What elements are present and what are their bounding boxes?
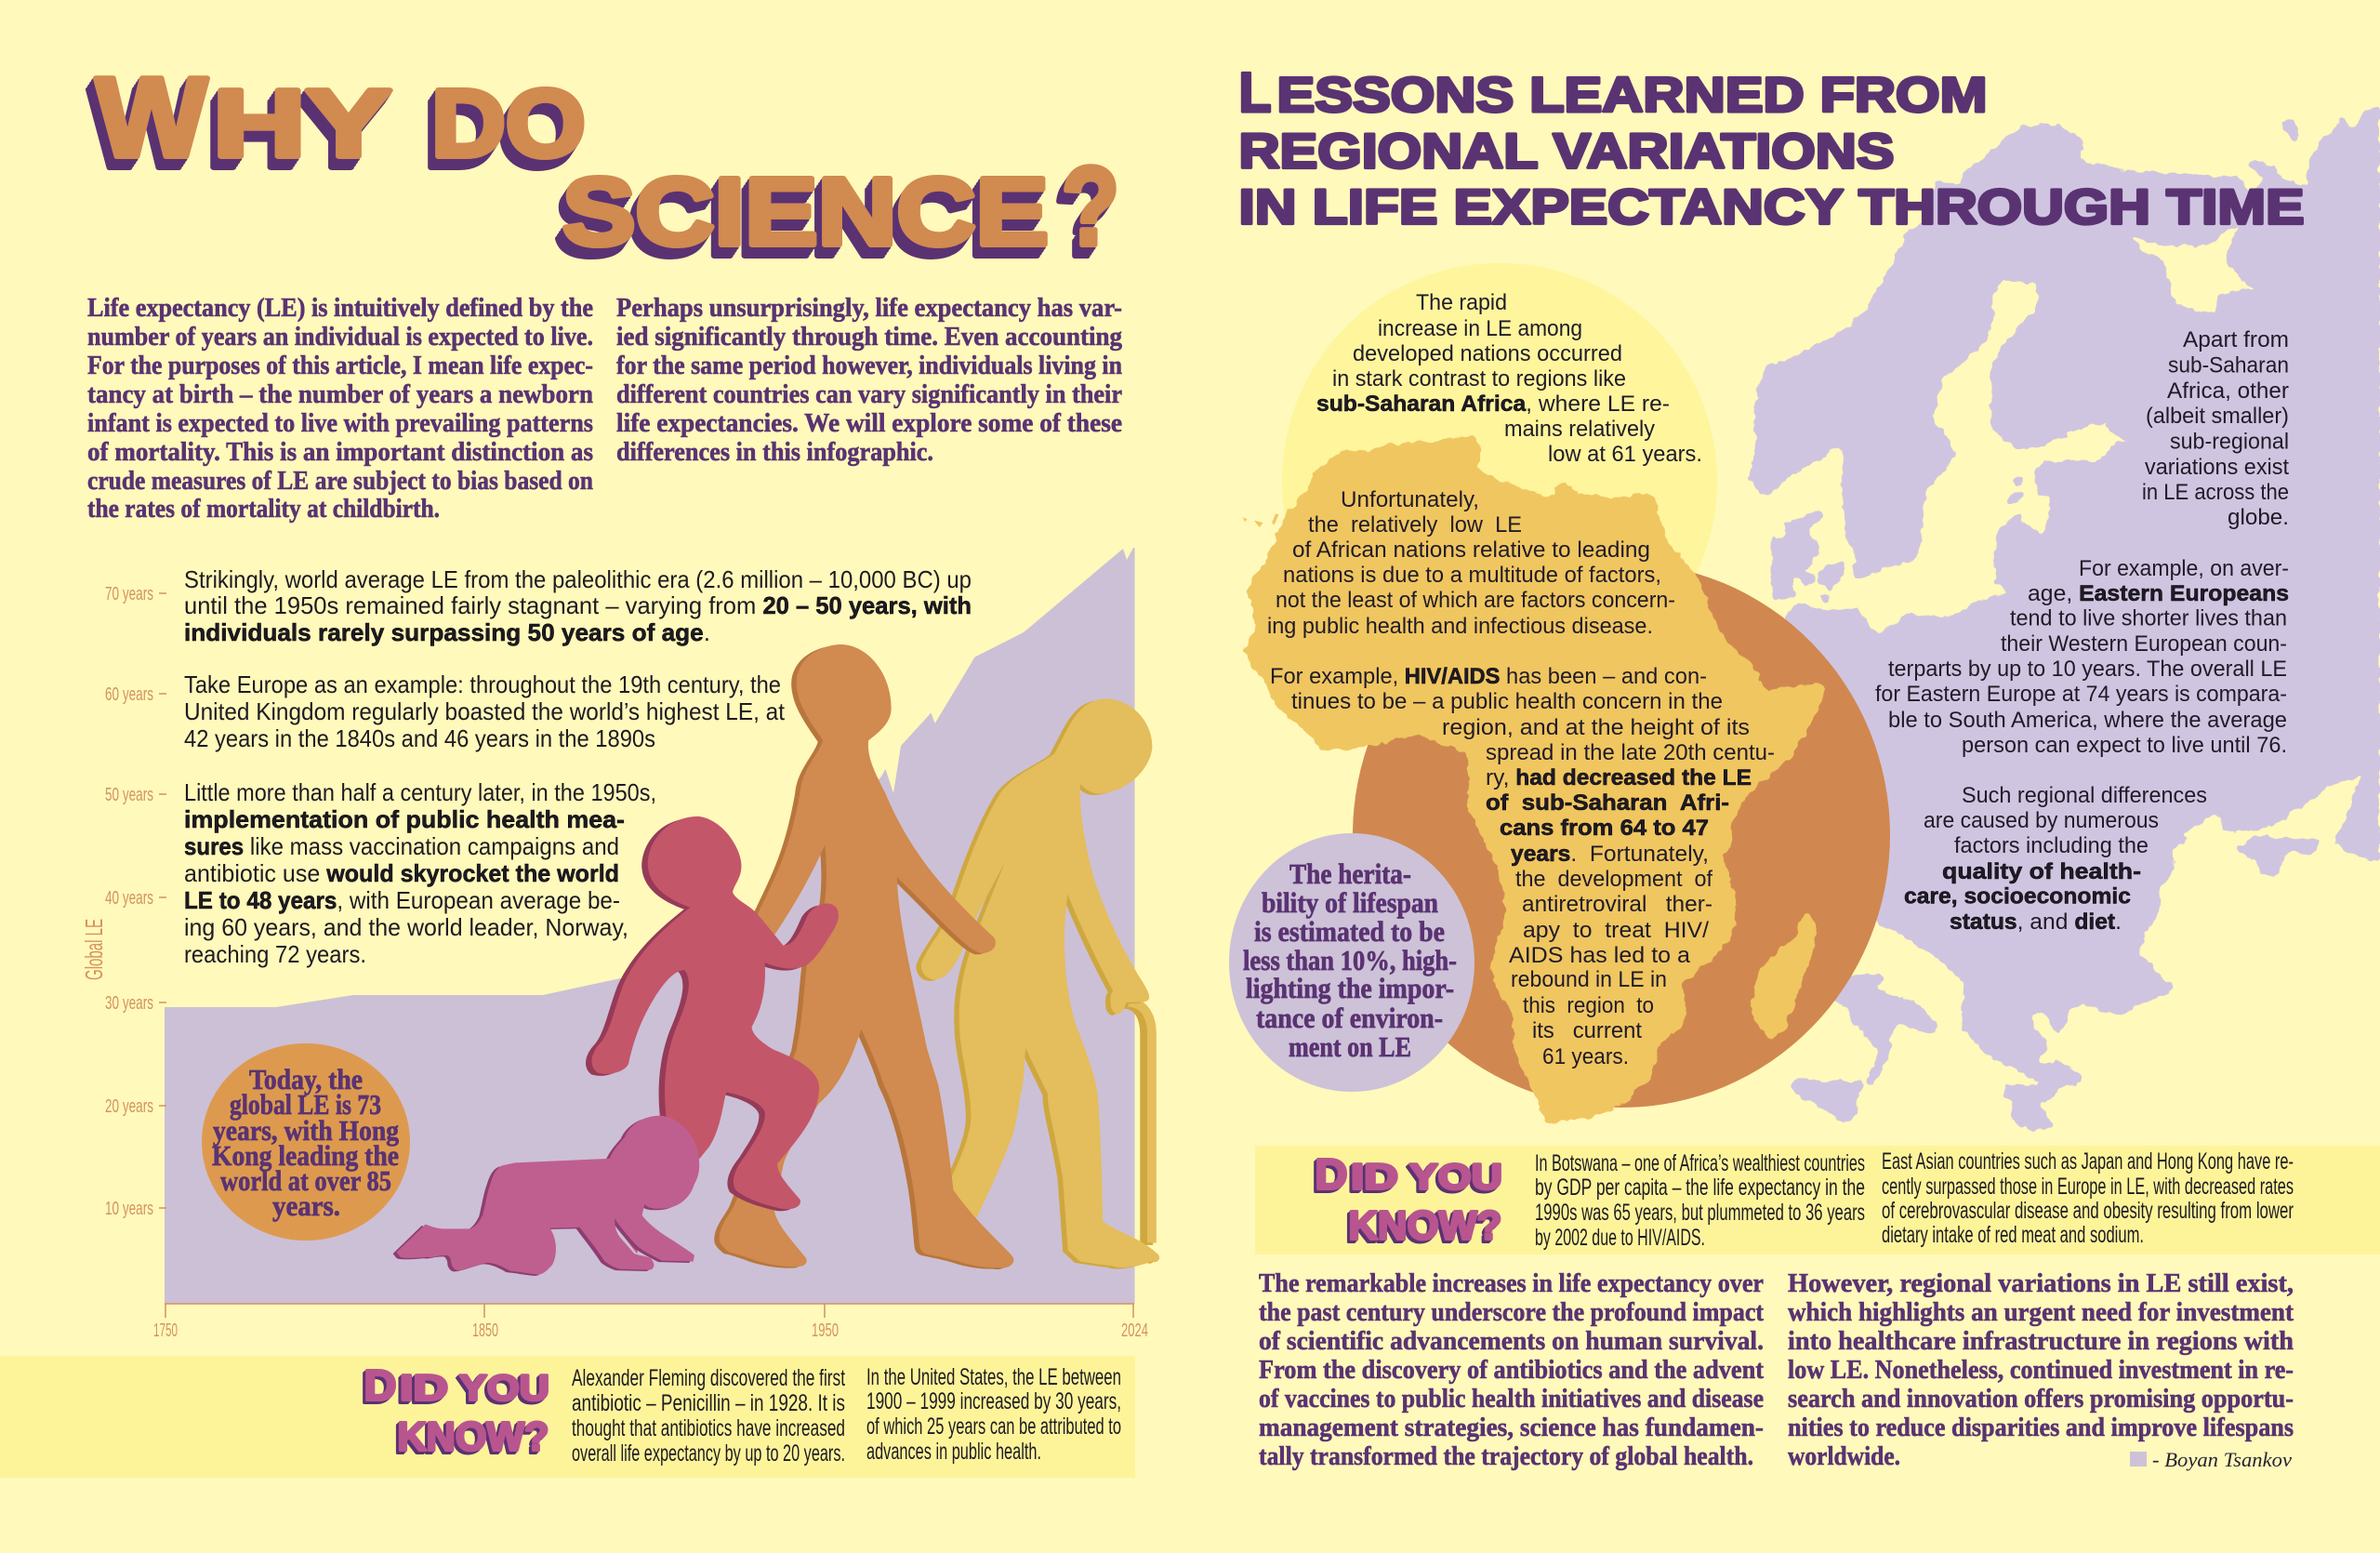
- figure: crawling baby: [397, 1116, 699, 1274]
- chart text: paleolithic era: Strikingly, world average LE from the paleolithic era (2.6 million – 10,000 BC) up: [184, 565, 972, 593]
- heading: did you know: ID: [1351, 1157, 1398, 1198]
- text: sub-regional variations: variations exist: [2145, 455, 2289, 480]
- figures: stages of life: [397, 644, 1159, 1274]
- chart text: 1950s public health: sures like mass vaccination campaigns and: [184, 832, 619, 860]
- callout: heritability of lifespan: [1229, 833, 1474, 1092]
- text: rapid increase in LE: low at 61 years.: [1548, 442, 1702, 467]
- callout: today's global LE: global LE is 73: [230, 1088, 381, 1121]
- chart text: paleolithic era: [184, 565, 972, 646]
- chart text: 1950s public health: antibiotic use would skyrocket the world: [184, 859, 619, 887]
- heading: did you know: [364, 1361, 549, 1460]
- map of Africa: [1243, 437, 1824, 1124]
- intro text: column one: [87, 293, 593, 524]
- text: sub-regional variations: Africa, other: [2167, 378, 2289, 404]
- fact: United States: 1900 – 1999 increased by 30 years,: [866, 1388, 1121, 1414]
- text: Eastern Europeans: ble to South America, where the average: [1888, 708, 2287, 733]
- conclusion text: column two: nities to reduce disparities and improve lifespans: [1788, 1413, 2294, 1442]
- conclusion text: column one: tally transformed the trajectory of global health.: [1259, 1441, 1753, 1471]
- conclusion text: column one: From the discovery of antibiotics and the advent: [1259, 1355, 1764, 1385]
- conclusion text: column one: the past century underscore the profound impact: [1259, 1297, 1764, 1327]
- text: Eastern Europeans: for Eastern Europe at 74 years is compara-: [1875, 682, 2287, 707]
- y axis labels: 50 years: [105, 785, 153, 805]
- Canary Islands: [1243, 513, 1278, 527]
- y axis labels: 30 years: [105, 993, 153, 1014]
- chart text: paleolithic era: until the 1950s remained fairly stagnant – varying from 20 – 50 years, with: [184, 591, 972, 619]
- text: regional differences: [1904, 783, 2207, 935]
- pale sun circle: [1282, 263, 1717, 698]
- fact: Botswana: In Botswana – one of Africa’s wealthiest countries: [1535, 1150, 1865, 1176]
- text: factors in Africa: nations is due to a multitude of factors,: [1283, 563, 1661, 588]
- heading: did you know: ID: [400, 1369, 448, 1408]
- fact: penicillin: thought that antibiotics have increased: [572, 1415, 845, 1441]
- text: rapid increase in LE: developed nations occurred: [1353, 341, 1622, 366]
- x axis labels: 2024: [1121, 1321, 1148, 1341]
- figure: child: [592, 816, 839, 1209]
- conclusion text: column two: which highlights an urgent need for investment: [1788, 1297, 2294, 1327]
- fact: penicillin: [572, 1365, 845, 1467]
- orange globe circle: [1353, 563, 1890, 1108]
- conclusion text: column two: However, regional variations in LE still exist,: [1788, 1268, 2294, 1298]
- callout: today's global LE: Kong leading the: [212, 1139, 399, 1172]
- fact: United States: In the United States, the LE between: [866, 1364, 1121, 1390]
- text: sub-regional variations: Apart from: [2183, 327, 2289, 352]
- intro text: column one: crude measures of LE are subject to bias based on: [87, 466, 593, 496]
- text: factors in Africa: not the least of which are factors concern-: [1276, 588, 1675, 613]
- text: rapid increase in LE: in stark contrast to regions like: [1332, 366, 1626, 392]
- figure: elderly person with cane: [921, 698, 1159, 1268]
- heading: did you know: KNOW?: [398, 1414, 549, 1460]
- text: regional differences: factors including the: [1954, 833, 2149, 858]
- title: lessons learned: REGIONAL VARIATIONS: [1238, 125, 1895, 179]
- intro text: column two: ied significantly through time. Even accounting: [616, 322, 1122, 352]
- intro text: column two: [616, 293, 1122, 467]
- conclusion text: column two: worldwide.: [1788, 1441, 1900, 1471]
- text: rapid increase in LE: [1316, 290, 1702, 467]
- callout: heritability of lifespan: is estimated to be: [1254, 915, 1445, 948]
- conclusion text: column two: [1788, 1268, 2294, 1471]
- text: sub-regional variations: [2142, 327, 2289, 530]
- callout: heritability of lifespan: The herita-: [1289, 857, 1411, 890]
- text: HIV/AIDS: tinues to be – a public health concern in the: [1291, 689, 1723, 714]
- fact: Botswana: 1990s was 65 years, but plummeted to 36 years: [1535, 1200, 1865, 1226]
- text: HIV/AIDS: its current: [1532, 1018, 1642, 1043]
- intro text: column one: infant is expected to live with prevailing patterns: [87, 408, 593, 438]
- fact: penicillin: Alexander Fleming discovered the first: [572, 1365, 845, 1391]
- fact: East Asia: [1882, 1148, 2294, 1248]
- text: sub-regional variations: sub-Saharan: [2168, 353, 2289, 378]
- figure: child's trailing leg: [612, 1205, 642, 1254]
- text: regional differences: quality of health-: [1942, 859, 2141, 884]
- callout: heritability of lifespan: bility of lifespan: [1262, 886, 1438, 919]
- fact: East Asia: dietary intake of red meat and sodium.: [1882, 1222, 2144, 1248]
- text: sub-regional variations: globe.: [2228, 505, 2289, 530]
- conclusion text: column one: of vaccines to public health initiatives and disease: [1259, 1384, 1764, 1414]
- text: HIV/AIDS: ry, had decreased the LE: [1486, 765, 1752, 790]
- text: HIV/AIDS: rebound in LE in: [1511, 967, 1667, 992]
- fact: United States: [866, 1364, 1121, 1465]
- intro text: column two: different countries can vary significantly in their: [616, 379, 1122, 409]
- fact: United States: of which 25 years can be attributed to: [866, 1414, 1121, 1440]
- heading: did you know: YOU: [1409, 1157, 1502, 1198]
- title: why do science: SCIENCE: [562, 158, 1049, 265]
- text: factors in Africa: the relatively low LE: [1308, 512, 1522, 538]
- title: lessons learned: [1238, 61, 2304, 234]
- title: lessons learned: ESSONS LEARNED FROM: [1277, 68, 1988, 123]
- text: factors in Africa: Unfortunately,: [1341, 487, 1479, 512]
- White Sea inlet: [2129, 220, 2266, 312]
- title: why do science: ?: [1062, 144, 1119, 269]
- map of Europe: [1750, 105, 2380, 1132]
- y axis labels: 70 years: [105, 584, 153, 604]
- chart text: 1950s public health: [184, 778, 656, 968]
- intro text: column one: the rates of mortality at childbirth.: [87, 494, 440, 524]
- text: HIV/AIDS: For example, HIV/AIDS has been – and con-: [1270, 664, 1707, 689]
- intro text: column one: Life expectancy (LE) is intuitively defined by the: [87, 293, 593, 323]
- chart text: 1950s public health: LE to 48 years, with European average be-: [184, 886, 620, 914]
- text: rapid increase in LE: The rapid: [1416, 290, 1507, 315]
- heading: did you know: D: [364, 1361, 396, 1410]
- text: regional differences: Such regional differences: [1962, 783, 2207, 808]
- intro text: column two: differences in this infographic.: [616, 437, 933, 467]
- intro text: column two: life expectancies. We will explore some of these: [616, 408, 1122, 438]
- text: regional differences: care, socioeconomic: [1904, 883, 2131, 909]
- text: Eastern Europeans: person can expect to live until 76.: [1962, 733, 2287, 758]
- text: HIV/AIDS: region, and at the height of its: [1442, 715, 1750, 740]
- text: factors in Africa: of African nations relative to leading: [1292, 538, 1650, 563]
- intro text: column one: tancy at birth – the number of years a newborn: [87, 379, 593, 409]
- text: HIV/AIDS: of sub-Saharan Afri-: [1486, 790, 1729, 816]
- heading: did you know: [1315, 1149, 1502, 1248]
- conclusion text: column one: of scientific advancements on human survival.: [1259, 1326, 1764, 1356]
- x axis labels: 1950: [812, 1321, 839, 1341]
- fact: penicillin: antibiotic – Penicillin – in 1928. It is: [572, 1390, 845, 1416]
- text: HIV/AIDS: apy to treat HIV/: [1523, 918, 1709, 943]
- conclusion text: column two: into healthcare infrastructure in regions with: [1788, 1326, 2294, 1356]
- title: why do science: W: [96, 54, 208, 180]
- y axis labels: 20 years: [105, 1096, 153, 1117]
- callout: heritability of lifespan: ment on LE: [1289, 1030, 1411, 1063]
- heading: did you know: YOU: [459, 1369, 549, 1408]
- text: Eastern Europeans: terparts by up to 10 years. The overall LE: [1888, 657, 2287, 682]
- fact: Botswana: [1535, 1150, 1865, 1251]
- chart text: paleolithic era: individuals rarely surpassing 50 years of age.: [184, 618, 710, 646]
- byline: - Boyan Tsankov: [2152, 1448, 2292, 1471]
- title: why do science: HY: [213, 70, 391, 177]
- y axis labels: [105, 584, 153, 1219]
- heading: did you know: KNOW?: [1348, 1203, 1502, 1248]
- panel: did you know, right: [1255, 1146, 2380, 1254]
- title: why do science: DO: [431, 70, 586, 177]
- text: HIV/AIDS: antiretroviral ther-: [1522, 892, 1712, 917]
- text: sub-regional variations: (albeit smaller): [2146, 404, 2289, 429]
- text: HIV/AIDS: cans from 64 to 47: [1500, 816, 1709, 841]
- y axis labels: 40 years: [105, 888, 153, 909]
- callout: today's global LE: [202, 1043, 410, 1241]
- conclusion text: column two: search and innovation offers promising opportu-: [1788, 1384, 2294, 1414]
- text: HIV/AIDS: the development of: [1515, 867, 1712, 892]
- title: why do science: [96, 54, 1119, 269]
- text: factors in Africa: ing public health and infectious disease.: [1267, 614, 1653, 639]
- conclusion text: column one: The remarkable increases in life expectancy over: [1259, 1268, 1764, 1298]
- text: sub-regional variations: in LE across the: [2142, 480, 2289, 505]
- fact: United States: advances in public health.: [866, 1439, 1041, 1465]
- figure: adult: [720, 644, 1013, 1268]
- title: lessons learned: IN LIFE EXPECTANCY THROUGH TIME: [1238, 180, 2304, 234]
- chart text: 1950s public health: reaching 72 years.: [184, 940, 366, 968]
- area chart: global life expectancy: [80, 548, 1148, 1341]
- chart text: Europe example: United Kingdom regularly boasted the world’s highest LE, at: [184, 697, 786, 725]
- x axis labels: [153, 1321, 1148, 1341]
- text: regional differences: are caused by numerous: [1924, 808, 2159, 833]
- callout: today's global LE: years, with Hong: [213, 1114, 399, 1147]
- text: HIV/AIDS: 61 years.: [1542, 1044, 1629, 1069]
- text: Eastern Europeans: tend to live shorter lives than: [2010, 606, 2287, 630]
- intro text: column two: Perhaps unsurprisingly, life expectancy has var-: [616, 293, 1122, 323]
- fact: Botswana: by 2002 due to HIV/AIDS.: [1535, 1225, 1705, 1251]
- panel: did you know, left: [0, 1356, 1135, 1478]
- text: regional differences: status, and diet.: [1950, 909, 2122, 935]
- conclusion text: column two: low LE. Nonetheless, continued investment in re-: [1788, 1355, 2294, 1385]
- y axis title: Global LE: [80, 919, 108, 980]
- intro text: column one: of mortality. This is an important distinction as: [87, 437, 593, 467]
- callout: heritability of lifespan: less than 10%, high-: [1243, 944, 1457, 976]
- text: Eastern Europeans: their Western European coun-: [2001, 631, 2287, 657]
- text: Eastern Europeans: [1875, 556, 2289, 758]
- text: HIV/AIDS: AIDS has led to a: [1509, 943, 1690, 968]
- y axis labels: 60 years: [105, 684, 153, 705]
- heading: did you know: D: [1315, 1149, 1348, 1198]
- title: lessons learned: L: [1238, 61, 1272, 124]
- text: factors in Africa: [1267, 487, 1675, 639]
- text: rapid increase in LE: increase in LE among: [1378, 316, 1582, 341]
- x axis labels: 1850: [472, 1321, 498, 1341]
- chart text: 1950s public health: implementation of public health mea-: [184, 805, 625, 833]
- text: HIV/AIDS: this region to: [1523, 993, 1654, 1018]
- text: rapid increase in LE: mains relatively: [1504, 417, 1656, 442]
- text: HIV/AIDS: spread in the late 20th centu-: [1486, 740, 1775, 765]
- intro text: column one: number of years an individual is expected to live.: [87, 322, 593, 352]
- chart text: Europe example: [184, 670, 786, 752]
- text: HIV/AIDS: [1270, 664, 1775, 1069]
- chart text: 1950s public health: Little more than half a century later, in the 1950s,: [184, 778, 656, 806]
- text: HIV/AIDS: years. Fortunately,: [1511, 842, 1709, 867]
- conclusion text: column one: [1259, 1268, 1764, 1471]
- callout: today's global LE: world at over 85: [220, 1164, 391, 1197]
- chart text: Europe example: Take Europe as an example: throughout the 19th century, the: [184, 670, 781, 698]
- conclusion text: column one: management strategies, science has fundamen-: [1259, 1413, 1764, 1442]
- fact: penicillin: overall life expectancy by up to 20 years.: [572, 1440, 845, 1467]
- callout: today's global LE: Today, the: [249, 1063, 363, 1095]
- text: Eastern Europeans: For example, on aver-: [2079, 556, 2289, 581]
- y axis labels: 10 years: [105, 1199, 153, 1219]
- intro text: column two: for the same period however, individuals living in: [616, 351, 1122, 380]
- fact: Botswana: by GDP per capita – the life expectancy in the: [1535, 1175, 1865, 1201]
- text: rapid increase in LE: sub-Saharan Africa, where LE re-: [1316, 392, 1670, 417]
- text: sub-regional variations: sub-regional: [2170, 430, 2289, 454]
- chart text: 1950s public health: ing 60 years, and the world leader, Norway,: [184, 913, 628, 941]
- text: Eastern Europeans: age, Eastern Europeans: [2028, 581, 2289, 606]
- callout: heritability of lifespan: tance of environ-: [1256, 1002, 1443, 1034]
- callout: heritability of lifespan: lighting the impor-: [1246, 972, 1454, 1004]
- intro text: column one: For the purposes of this article, I mean life expec-: [87, 351, 593, 380]
- chart text: Europe example: 42 years in the 1840s and 46 years in the 1890s: [184, 724, 655, 752]
- x axis labels: 1750: [153, 1321, 178, 1341]
- callout: today's global LE: years.: [272, 1189, 340, 1222]
